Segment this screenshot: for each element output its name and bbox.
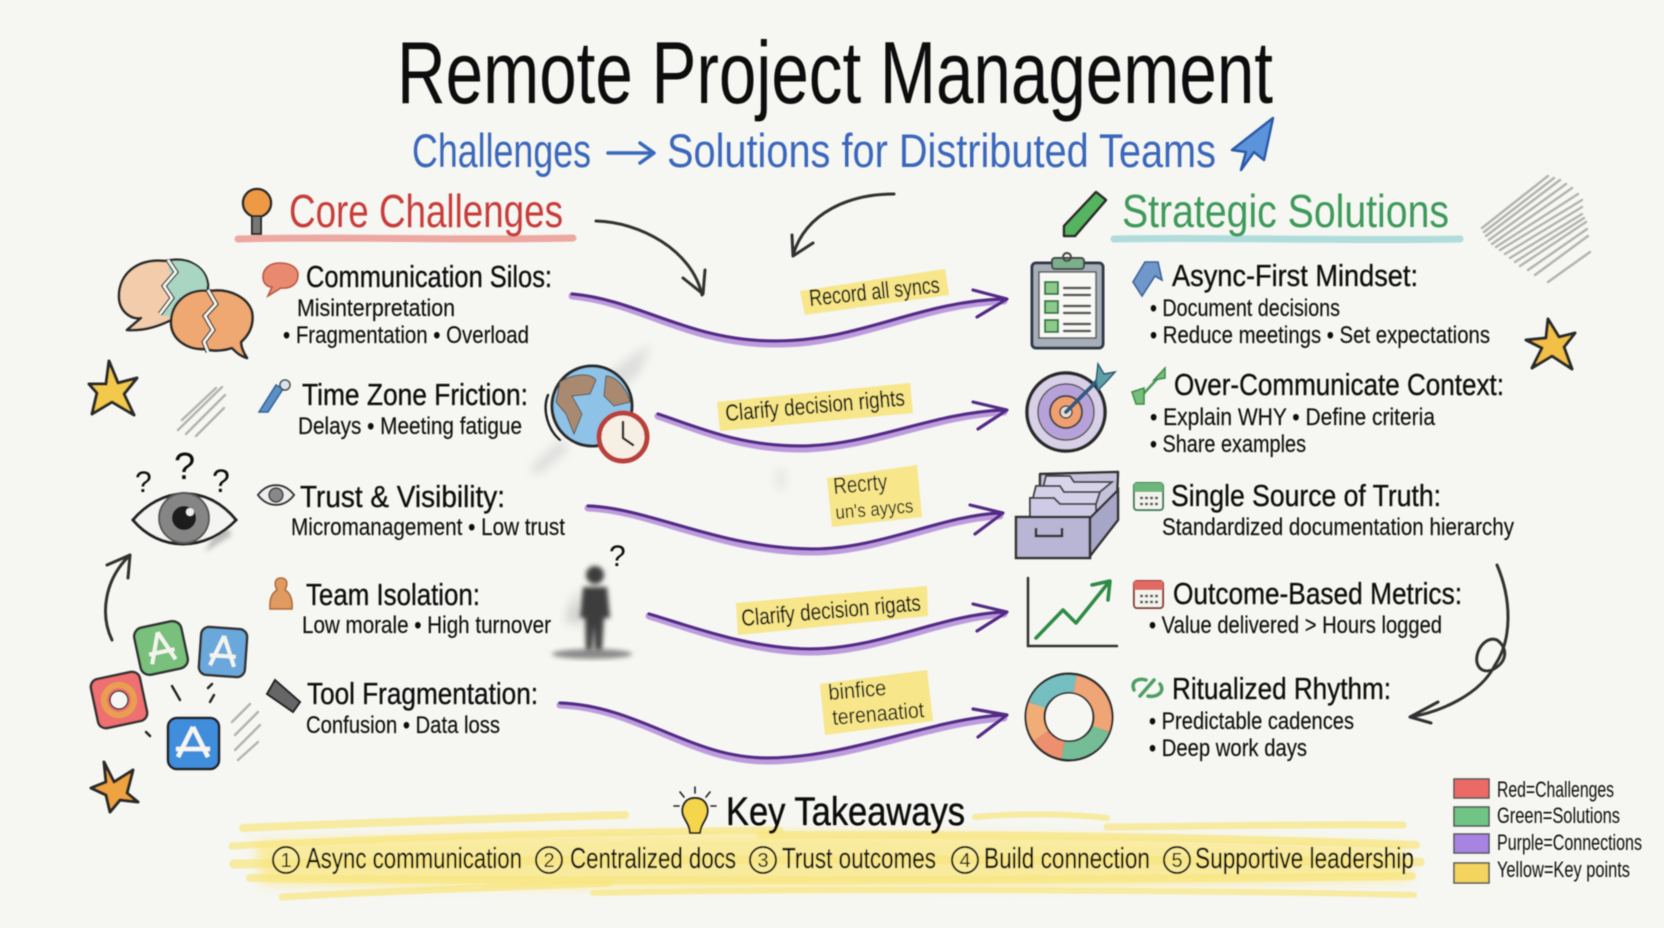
grey smudges behind globe	[530, 344, 785, 490]
takeaway 4	[952, 843, 1150, 875]
yellow highlighter band	[232, 814, 1420, 897]
takeaway 2	[536, 843, 736, 875]
connector: silos to async	[572, 290, 1007, 344]
takeaway 1: 1	[280, 850, 292, 872]
icon: large eye with question marks: ?	[212, 463, 230, 499]
solution: ritualized rhythm: • Deep work days	[1149, 735, 1307, 762]
callout: garbled note one: un's ayycs	[835, 496, 914, 524]
icon: scattered app tiles	[89, 620, 248, 769]
legend: red	[1454, 777, 1614, 802]
icon: green marker	[1064, 192, 1106, 236]
icon: ring of cycle arrows	[1035, 683, 1103, 751]
challenge: communication silos: • Fragmentation • Overload	[283, 322, 529, 349]
legend: red: Red=Challenges	[1497, 777, 1614, 802]
takeaway 5: 5	[1171, 850, 1183, 872]
challenge: team isolation: Low morale • High turnover	[302, 612, 551, 639]
challenge: time zone friction: Delays • Meeting fatigue	[298, 413, 522, 440]
connector: trust to source of truth	[588, 505, 1003, 552]
icon: file cabinet	[1016, 472, 1118, 558]
takeaway 1: Async communication	[306, 843, 522, 875]
solution: over-communicate context: • Explain WHY • Define criteria	[1150, 404, 1436, 431]
icon: light bulb	[674, 787, 716, 833]
takeaway 3: 3	[757, 850, 769, 872]
arrow: left up arrow	[106, 555, 130, 640]
challenge: tool fragmentation: Tool Fragmentation:	[307, 676, 538, 711]
callout: garbled note one: Recrty	[832, 468, 889, 499]
takeaway 2: 2	[543, 850, 555, 872]
challenge: tool fragmentation	[267, 676, 538, 739]
challenge: trust and visibility: Micromanagement • Low trust	[291, 514, 565, 541]
takeaway 5: Supportive leadership	[1195, 843, 1414, 875]
subtitle: Solutions for Distributed Teams	[667, 124, 1216, 177]
icon: yellow star left	[89, 361, 137, 415]
takeaway 1	[273, 843, 522, 875]
challenge: communication silos	[263, 259, 552, 349]
connector: tools to rhythm	[560, 703, 1007, 761]
icon: globe and clock	[546, 366, 647, 461]
solution: ritualized rhythm	[1133, 671, 1391, 762]
legend: green: Green=Solutions	[1497, 803, 1620, 828]
solution: over-communicate context: • Share examples	[1150, 431, 1306, 458]
takeaway 4: 4	[959, 850, 971, 872]
icon: large eye with question marks	[133, 446, 236, 552]
icon: yellow star right	[1526, 319, 1575, 369]
icon: blue paper plane arrow	[1232, 118, 1273, 170]
challenge: trust and visibility: Trust & Visibility:	[300, 479, 505, 514]
panel: strategic solutions heading: Strategic Solutions	[1122, 185, 1449, 237]
callout: record all syncs: Record all syncs	[808, 271, 941, 311]
challenge: communication silos: Communication Silos:	[306, 259, 552, 294]
solution: over-communicate context: Over-Communicate Context:	[1174, 367, 1504, 402]
solution: ritualized rhythm: • Predictable cadences	[1149, 708, 1354, 735]
panel: core challenges heading: Core Challenges	[289, 185, 563, 237]
callout: garbled note two	[820, 670, 933, 735]
icon: isolated figure	[552, 540, 660, 659]
arrow: curved arrow from solutions	[792, 194, 894, 256]
arrow: right looped arrow	[1410, 565, 1508, 723]
challenge: team isolation	[270, 577, 551, 639]
solution: async-first mindset: Async-First Mindset:	[1172, 258, 1418, 293]
solution: async-first mindset	[1133, 258, 1490, 349]
icon: orange star left	[91, 762, 138, 812]
solution: ritualized rhythm: Ritualized Rhythm:	[1172, 671, 1391, 706]
solution: single source of truth: Single Source of Truth:	[1171, 478, 1441, 513]
icon: growth chart	[1028, 578, 1117, 646]
challenge: tool fragmentation: Confusion • Data loss	[306, 712, 500, 739]
legend: green	[1454, 803, 1620, 828]
callout: garbled note two: terenaatiot	[831, 697, 925, 730]
icon: isolated figure: ?	[609, 540, 626, 573]
solution: over-communicate context	[1132, 367, 1504, 458]
icon: clipboard	[1032, 253, 1103, 348]
scribble near star	[178, 387, 225, 436]
heading: Key Takeaways	[726, 790, 965, 834]
icon: large eye with question marks: ?	[135, 466, 152, 499]
subtitle: Challenges	[412, 124, 591, 177]
icon: orange pin	[243, 189, 271, 234]
challenge: time zone friction	[259, 377, 528, 440]
icon: target and dart	[1027, 364, 1115, 451]
takeaway 4: Build connection	[984, 843, 1150, 875]
subtitle	[412, 124, 1216, 177]
solution: outcome-based metrics: Outcome-Based Metrics:	[1173, 576, 1462, 611]
takeaway 3	[750, 843, 936, 875]
connector: isolation to metrics	[649, 604, 1007, 652]
hatch scribble top right	[1482, 176, 1590, 282]
arrow: curved arrow to first connector	[596, 221, 705, 295]
callout: garbled note two: binfice	[827, 675, 887, 705]
title: Remote Project Management	[397, 23, 1273, 122]
legend	[1454, 777, 1642, 883]
legend: yellow	[1454, 857, 1630, 883]
challenge: communication silos: Misinterpretation	[297, 295, 455, 322]
callout: clarify decision rigats: Clarify decision rigats	[740, 589, 922, 631]
callout: garbled note one	[827, 465, 922, 527]
callout: clarify decision rights: Clarify decision rights	[724, 384, 906, 426]
scribble by app tiles	[232, 704, 260, 760]
challenge: trust and visibility	[258, 479, 565, 541]
takeaway 3: Trust outcomes	[782, 843, 936, 875]
icon: large eye with question marks: ?	[174, 446, 195, 488]
legend: purple	[1454, 830, 1642, 855]
challenge: team isolation: Team Isolation:	[306, 577, 480, 612]
solution: async-first mindset: • Document decisions	[1150, 295, 1340, 322]
connector: time zone to context	[658, 402, 1007, 449]
solution: async-first mindset: • Reduce meetings • Set expectations	[1150, 322, 1490, 349]
challenge: time zone friction: Time Zone Friction:	[302, 377, 528, 412]
solution: outcome-based metrics	[1134, 576, 1462, 639]
solution: outcome-based metrics: • Value delivered > Hours logged	[1149, 612, 1442, 639]
icon: broken speech bubbles	[119, 260, 253, 358]
panel: key takeaways	[232, 787, 1420, 897]
takeaway 2: Centralized docs	[570, 843, 736, 875]
solution: single source of truth	[1134, 478, 1514, 541]
solution: single source of truth: Standardized documentation hierarchy	[1162, 514, 1514, 541]
